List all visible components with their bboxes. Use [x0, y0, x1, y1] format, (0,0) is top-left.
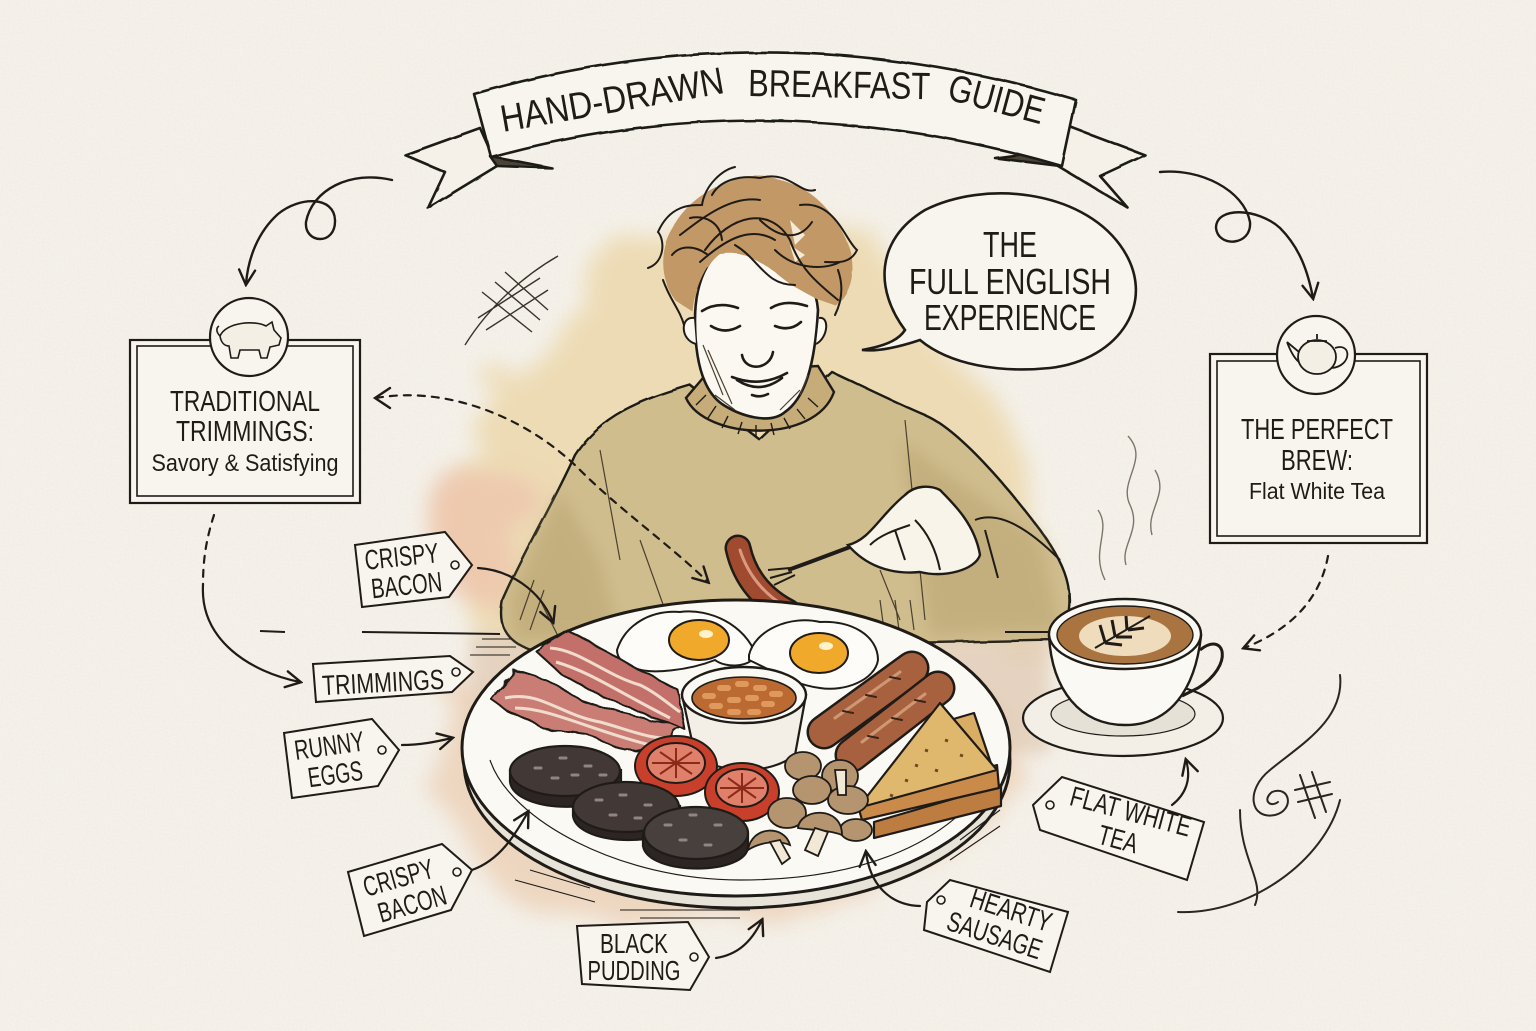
hair highlights: [790, 220, 805, 262]
latte leaf: [1095, 616, 1150, 648]
tag: runny eggs: EGGS: [306, 755, 365, 793]
tag: runny eggs: [284, 719, 399, 798]
title text: GUIDE: [944, 67, 1049, 133]
ears: [684, 318, 826, 344]
dashed arrows: [203, 395, 1328, 648]
panel: perfect brew: [1210, 316, 1427, 543]
bubble text: FULL ENGLISH: [909, 261, 1111, 302]
plate: [462, 600, 1010, 918]
tag: crispy bacon bottom: [348, 844, 472, 936]
hair: [663, 176, 852, 312]
panel text: THE PERFECT: [1241, 414, 1393, 446]
fried eggs: [617, 611, 878, 689]
mushrooms: [748, 752, 872, 864]
tomatoes: [635, 736, 779, 821]
black pudding: [510, 746, 748, 868]
bubble text: THE: [983, 224, 1037, 265]
arrowhead: dashed start: [375, 388, 390, 408]
tag: flat white tea: [1033, 777, 1204, 880]
panel text: TRADITIONAL: [170, 386, 320, 418]
title text: [497, 60, 1049, 141]
steam: [1098, 436, 1160, 580]
decorative swirl: [1178, 675, 1340, 912]
tag: runny eggs: RUNNY: [292, 726, 366, 766]
arrow: trimmings to tag: [203, 585, 300, 682]
tag: hearty sausage: SAUSAGE: [943, 905, 1046, 965]
tag: crispy bacon bottom: BACON: [374, 880, 450, 929]
saucer: [1023, 680, 1223, 756]
curly arrow: banner to trimmings: [246, 177, 392, 284]
tag: hearty sausage: HEARTY: [966, 882, 1056, 938]
sausage on fork: [738, 548, 788, 612]
person: [501, 167, 1070, 650]
tag: trimmings: TRIMMINGS: [321, 664, 445, 701]
sausages: [824, 668, 938, 755]
tag: black pudding: BLACK: [600, 928, 668, 959]
panel: traditional trimmings: [130, 298, 360, 503]
panel text: [1241, 414, 1393, 504]
watercolor wash: [430, 215, 1050, 924]
latte foam: [1079, 616, 1171, 656]
hair strokes: [648, 167, 857, 325]
collar: [686, 366, 834, 431]
title text: BREAKFAST: [748, 63, 931, 108]
tag: hearty sausage: [924, 878, 1068, 972]
bubble text: [909, 224, 1111, 338]
sweater: [501, 372, 1070, 650]
plate of food: [462, 600, 1010, 918]
pointer arrows: [402, 568, 1188, 958]
bubble text: EXPERIENCE: [924, 297, 1096, 338]
hatching top left: [465, 256, 558, 345]
eyes and mouth: [702, 303, 807, 396]
table line: [260, 631, 1060, 634]
tag: black pudding: [577, 922, 709, 990]
tag: crispy bacon top: [355, 532, 472, 607]
panel text: TRIMMINGS:: [176, 416, 314, 448]
toast: [858, 703, 1001, 838]
tag: flat white tea: FLAT WHITE: [1067, 780, 1195, 843]
tag: crispy bacon top: BACON: [370, 566, 444, 604]
neck shading: [703, 345, 808, 410]
tag: crispy bacon top: CRISPY: [363, 537, 440, 576]
icon: teapot: [1277, 316, 1355, 394]
bacon: [490, 630, 685, 753]
baked beans bowl: [682, 667, 806, 770]
icon: pig: [210, 298, 288, 376]
coffee cup: [1023, 599, 1223, 756]
panel text: Flat White Tea: [1249, 478, 1385, 504]
tag: crispy bacon bottom: CRISPY: [360, 853, 437, 903]
title banner: [405, 52, 1145, 208]
tag: flat white tea: TEA: [1095, 819, 1142, 859]
title text: HAND-DRAWN: [497, 60, 727, 141]
speech bubble: [862, 193, 1136, 369]
panel text: [152, 386, 338, 477]
panel text: BREW:: [1281, 445, 1353, 477]
sweater shading: [510, 440, 1060, 640]
panel text: Savory & Satisfying: [152, 450, 338, 477]
tag: black pudding: PUDDING: [588, 955, 680, 986]
hand and fork: [848, 487, 980, 574]
face: [695, 240, 818, 418]
cup: [1049, 636, 1201, 725]
curly arrow: banner to brew: [1160, 172, 1313, 298]
